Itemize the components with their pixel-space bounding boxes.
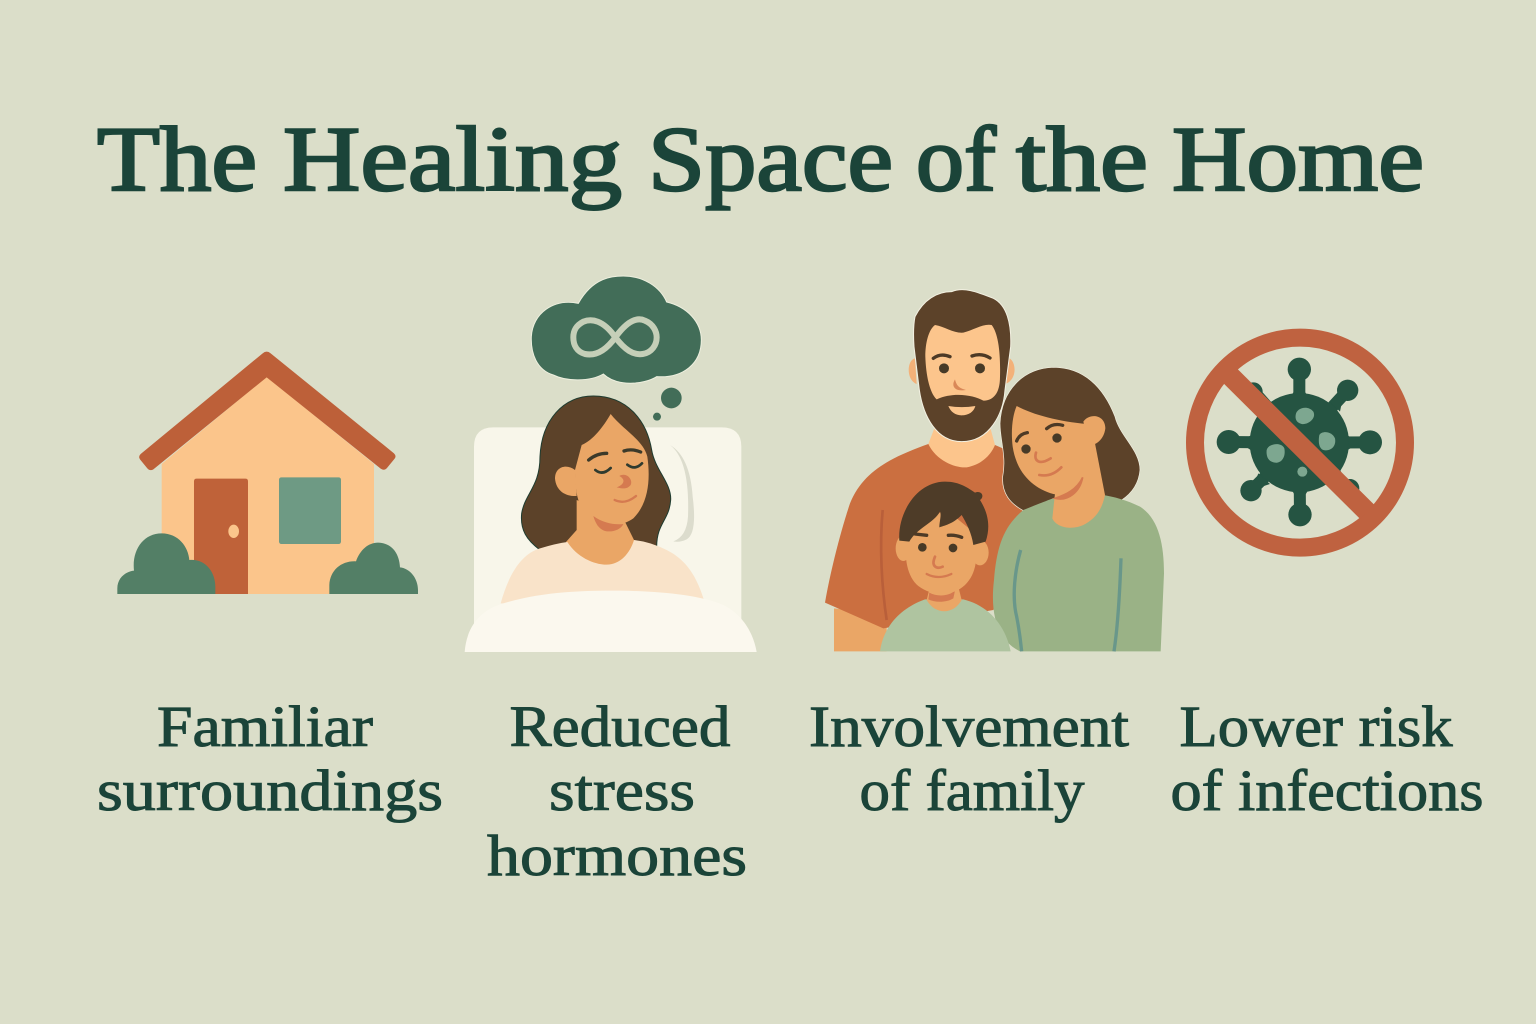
father face (925, 325, 1000, 401)
infinity symbol (573, 319, 657, 354)
boy top (880, 599, 1011, 651)
hair (521, 396, 671, 550)
boy nose (934, 557, 943, 568)
boy neck (927, 587, 962, 611)
pillow crease (670, 445, 694, 542)
neck (566, 500, 637, 567)
label: reduced stress hormones: stress (549, 758, 695, 823)
virus (1217, 358, 1382, 526)
pillow (474, 427, 741, 637)
thought bubble large (661, 388, 682, 408)
father shirt fold (881, 510, 887, 620)
virus spike tips (1288, 358, 1311, 381)
boy hair (899, 482, 988, 545)
father head (914, 290, 1011, 442)
father neck (928, 427, 995, 467)
mother smile (1039, 467, 1061, 475)
mother ear (1083, 416, 1105, 445)
label: familiar surroundings: surroundings (97, 758, 443, 823)
house roof (139, 352, 396, 470)
door (194, 479, 248, 594)
house wall (162, 377, 374, 594)
closed eyes (595, 463, 642, 473)
prohibition slash (1229, 375, 1367, 512)
virus spike bases (1238, 383, 1360, 503)
thought bubble small (653, 413, 661, 421)
virus spots (1267, 408, 1335, 477)
father shirt (825, 444, 1027, 628)
mother eyes (1021, 444, 1031, 454)
icon: family of three (825, 290, 1164, 651)
title: of (916, 108, 996, 210)
mother top (993, 495, 1164, 651)
mother eyebrows (1017, 425, 1063, 441)
father nose (953, 379, 966, 390)
eyebrows (589, 450, 641, 460)
mother top seams (1014, 550, 1121, 651)
mother hair (1000, 367, 1140, 511)
label: lower risk of infections: of infections (1170, 758, 1484, 823)
label: familiar surroundings (97, 694, 443, 823)
label: involvement of family (809, 694, 1129, 823)
right bush (329, 543, 418, 594)
label: lower risk of infections: Lower risk (1180, 694, 1452, 759)
smile (615, 496, 636, 502)
virus body (1250, 393, 1349, 492)
door knob (228, 525, 239, 538)
label: reduced stress hormones (487, 694, 747, 888)
title (97, 108, 1424, 210)
chin shadow (593, 516, 623, 531)
mother neck (1052, 443, 1105, 528)
label: reduced stress hormones: Reduced (510, 694, 730, 759)
icon: house with bushes (117, 352, 418, 594)
top (501, 540, 704, 607)
virus spikes (1229, 370, 1370, 514)
mother nose (1035, 453, 1051, 462)
boy smile (927, 574, 951, 577)
blanket (465, 591, 757, 652)
boy head (905, 510, 977, 594)
ear (555, 467, 577, 496)
boy ears (896, 536, 911, 561)
face (575, 414, 649, 525)
icon: woman resting in bed with thought cloud (465, 276, 757, 652)
label: involvement of family: of family (860, 758, 1084, 823)
label: lower risk of infections (1170, 694, 1484, 823)
label: familiar surroundings: Familiar (157, 694, 373, 759)
father ears (909, 357, 1015, 384)
nose (617, 475, 631, 488)
left bush (117, 533, 215, 594)
title: The (97, 108, 257, 210)
mother face (1012, 406, 1094, 495)
prohibition ring (1195, 338, 1405, 548)
boy eyebrows (915, 534, 962, 537)
father mouth (948, 406, 975, 415)
mother chin shadow (1055, 477, 1083, 499)
boy eyes (918, 543, 927, 552)
window (279, 477, 341, 544)
thought cloud (531, 276, 701, 383)
title: Home (1172, 108, 1424, 210)
label: reduced stress hormones: hormones (487, 823, 747, 888)
title: Space (648, 108, 893, 210)
father arm (834, 608, 887, 651)
father eyebrows (933, 355, 990, 358)
label: involvement of family: Involvement (809, 694, 1129, 759)
title: Healing (283, 108, 622, 210)
father eyes (939, 363, 949, 373)
boy chin shadow (928, 591, 955, 602)
title: the (1016, 108, 1148, 210)
icon: no viruses sign (1195, 338, 1405, 548)
